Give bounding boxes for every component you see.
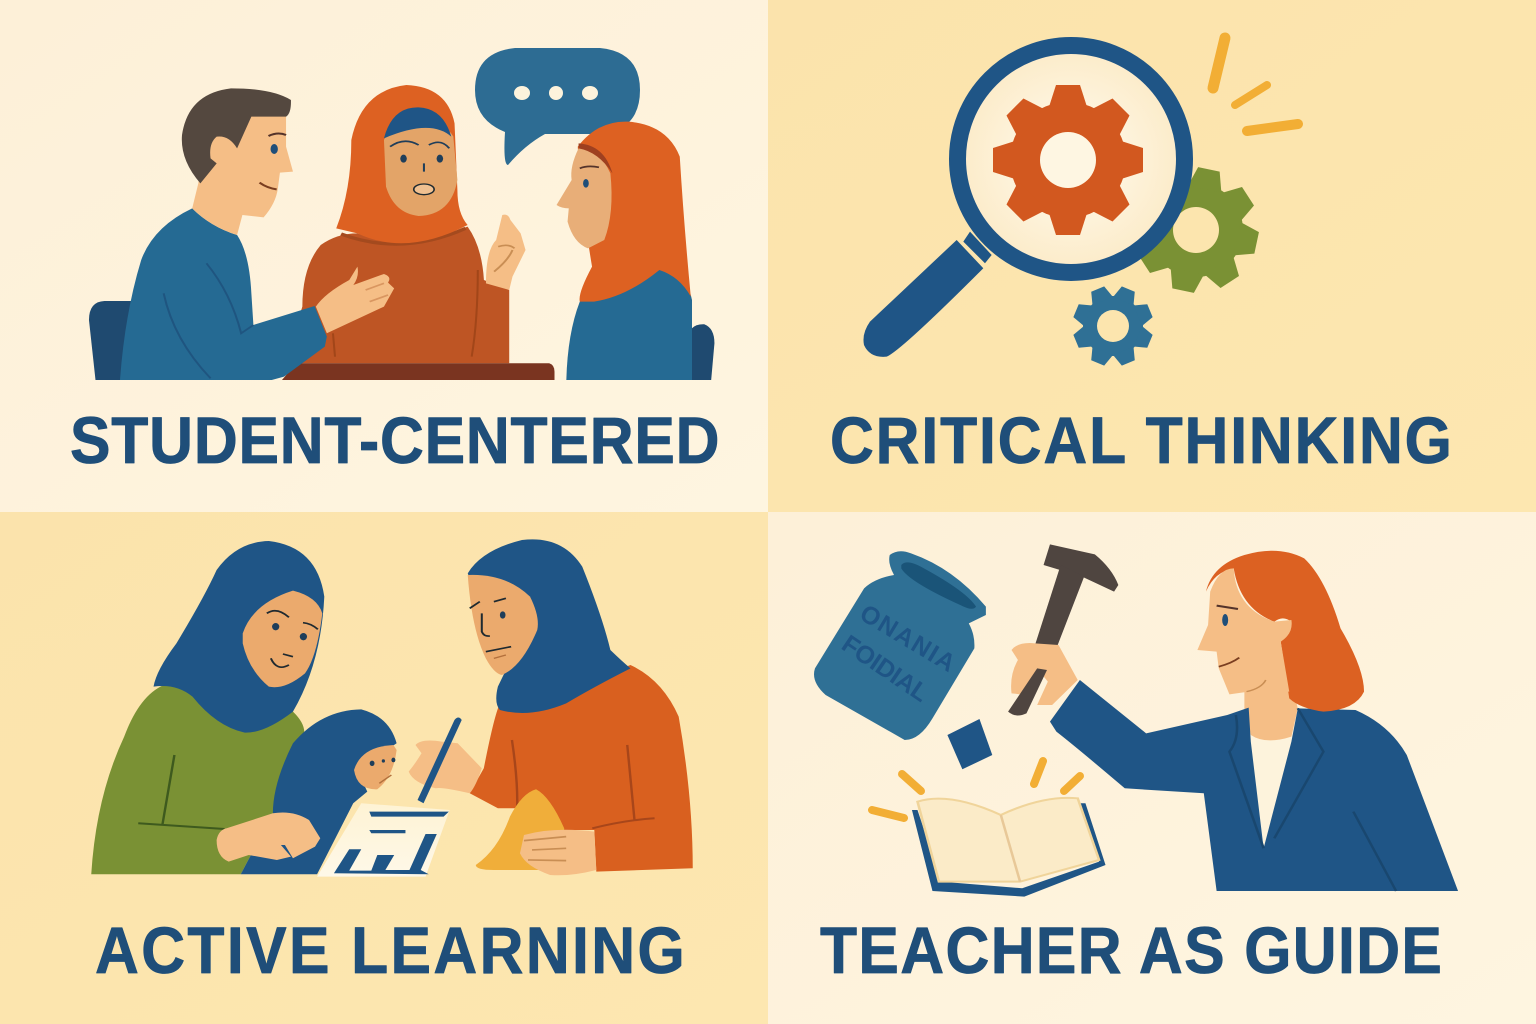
icon: hammer <box>1008 544 1118 715</box>
icon: blue gear <box>1061 274 1165 378</box>
heading: ACTIVE LEARNING <box>95 915 685 988</box>
figure: teacher <box>1050 551 1458 891</box>
figure: woman in orange hijab <box>284 85 526 363</box>
falling fragment <box>947 719 992 769</box>
figure: woman in green <box>91 541 324 874</box>
figure: woman in orange <box>409 539 693 872</box>
illustration: teacher, jar, hammer, book <box>814 544 1458 897</box>
figure: child <box>241 709 397 874</box>
figure: man in blue <box>120 88 394 380</box>
heading: STUDENT-CENTERED <box>70 405 720 478</box>
worksheet <box>317 803 450 877</box>
yellow cloth <box>476 789 566 870</box>
heading: CRITICAL THINKING <box>830 405 1452 478</box>
panel: teacher as guide <box>768 512 1536 1024</box>
chair right <box>692 324 714 380</box>
heading: TEACHER AS GUIDE <box>820 915 1442 988</box>
panel: active learning <box>0 512 768 1024</box>
figure: woman at right <box>557 122 692 380</box>
hand <box>217 812 320 862</box>
jar label line two: FOIDIAL <box>837 630 934 708</box>
icon: green gear <box>1122 156 1270 304</box>
spark ticks <box>872 761 1080 818</box>
panel: student-centered <box>0 0 768 512</box>
hand <box>520 830 596 875</box>
icon: pen <box>418 717 462 803</box>
icon: spark lines <box>1213 38 1298 131</box>
table <box>282 363 555 380</box>
speech bubble <box>475 48 640 165</box>
icon: orange gear <box>993 85 1143 235</box>
illustration: three people talking <box>89 85 714 380</box>
jar label line one: ONANIA <box>855 599 960 678</box>
panel: critical thinking <box>768 0 1536 512</box>
icon: jar <box>814 551 986 740</box>
icon: open book <box>912 798 1106 897</box>
illustration: students working together <box>91 539 693 877</box>
chair left <box>89 301 133 380</box>
icon: magnifying glass <box>863 46 1184 357</box>
